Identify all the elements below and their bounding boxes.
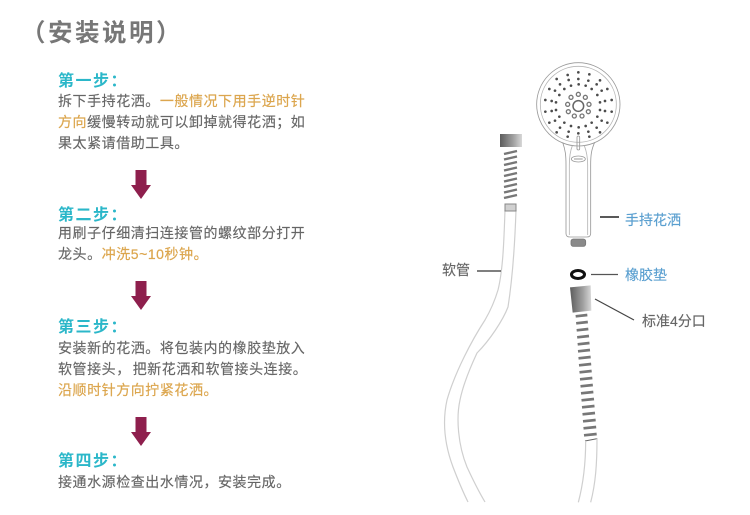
step 2 text — [58, 225, 305, 262]
icon: rubber washer — [572, 270, 584, 278]
label: hose: 软管 — [442, 262, 470, 278]
icon: shower head — [537, 63, 620, 246]
step 1 heading: 第一步： — [58, 73, 128, 90]
hose: long curved tube — [445, 210, 516, 502]
step 4 text: 接通水源检查出水情况， 安装完成。 — [58, 474, 291, 490]
step 3 text: 软管接头， 把新花洒和软管接头连接。 — [58, 361, 307, 377]
leader line: hose — [477, 270, 501, 272]
title: （安装说明） — [21, 20, 183, 47]
leader line: handheld shower — [600, 216, 619, 218]
arrow: step 2 to step 3 — [131, 281, 151, 310]
step 4 heading: 第四步： — [58, 453, 128, 470]
label: handheld shower: 手持花洒 — [625, 212, 681, 228]
leader line: connector — [595, 299, 634, 320]
step 1 text: 果太紧请借助工具。 — [58, 135, 189, 151]
step 3 text: 沿顺时针方向拧紧花洒。 — [58, 382, 218, 398]
label: standard connector: 标准4分口 — [642, 313, 706, 329]
step 2 text: 龙头。冲洗5~10秒钟。 — [58, 246, 208, 262]
step 1 text: 方向缓慢转动就可以卸掉就得花洒；如 — [58, 114, 305, 130]
step 1 text: 拆下手持花洒。一般情况下用手逆时针 — [58, 93, 305, 109]
leader line: washer — [591, 274, 618, 276]
step 3 heading: 第三步： — [58, 319, 128, 336]
step 2 text: 用刷子仔细清扫连接管的螺纹部分打开 — [58, 225, 305, 241]
hose: lower fitting and spring — [570, 285, 597, 502]
arrow: step 3 to step 4 — [131, 417, 151, 446]
step 2 heading: 第二步： — [58, 207, 128, 224]
step 3 text: 安装新的花洒。将包装内的橡胶垫放入 — [58, 340, 305, 356]
hose: upper fitting and spring — [500, 134, 522, 211]
arrow: step 1 to step 2 — [131, 170, 151, 199]
label: rubber washer: 橡胶垫 — [625, 267, 667, 283]
step 3 text — [58, 340, 307, 398]
step 1 text — [58, 93, 305, 151]
